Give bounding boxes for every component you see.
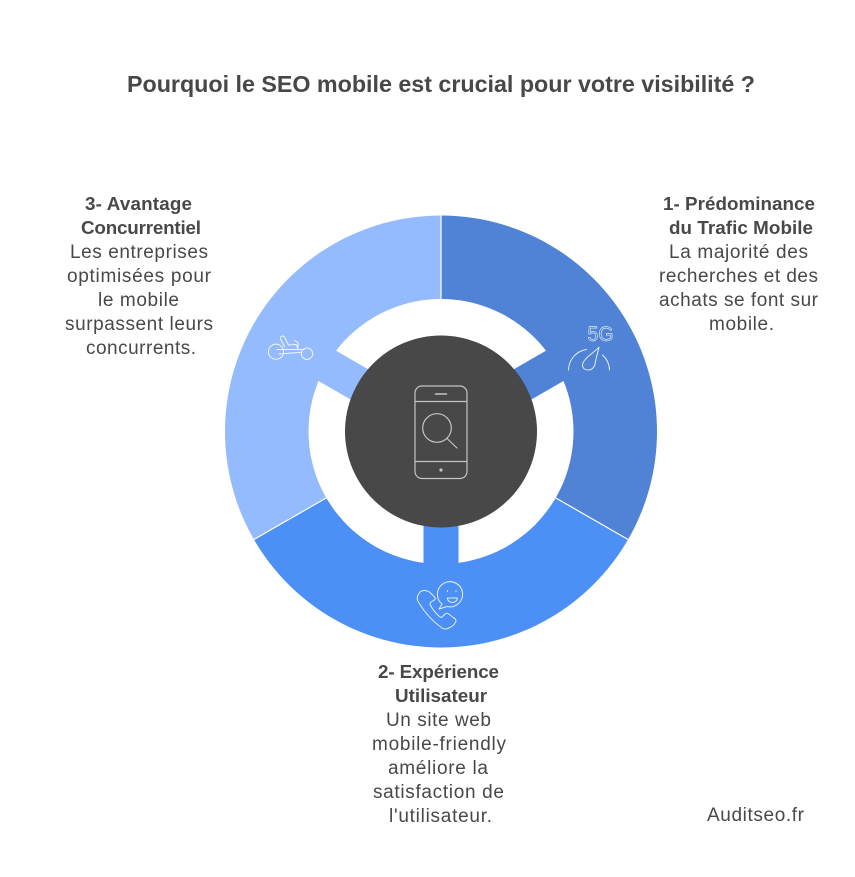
white inner ring [308, 299, 574, 564]
center circle [345, 336, 537, 528]
text block: 2 user experience: l'utilisateur. [389, 806, 492, 827]
text block: 1 mobile traffic [659, 193, 819, 335]
icon: 5G speedometer [568, 323, 614, 370]
text block: 3 competitive advantage: 3- Avantage [85, 193, 192, 214]
icon: smartphone with magnifier [415, 386, 467, 478]
source label: Auditseo.fr [707, 805, 805, 826]
text block: 2 user experience: satisfaction de [373, 782, 504, 803]
text block: 2 user experience: mobile-friendly [372, 734, 506, 755]
text block: 3 competitive advantage: Les entreprises [70, 242, 208, 263]
text block: 1 mobile traffic: mobile. [709, 314, 774, 335]
connector: segment 3 [310, 346, 414, 426]
text block: 1 mobile traffic: du Trafic Mobile [669, 217, 813, 238]
text block: 3 competitive advantage: le mobile [98, 290, 179, 311]
text block: 3 competitive advantage: optimisées pour [67, 266, 212, 287]
text block: 3 competitive advantage: surpassent leurs [65, 314, 213, 335]
icon: recumbent bike [268, 336, 313, 359]
text block: 1 mobile traffic: 1- Prédominance [663, 193, 815, 214]
text block: 1 mobile traffic: recherches et des [659, 266, 818, 287]
text block: 2 user experience: Utilisateur [395, 685, 488, 706]
text block: 2 user experience [372, 661, 506, 827]
icon: call with smiley [417, 582, 463, 629]
segment 1: mobile traffic [441, 216, 657, 540]
segment 3: competitive advantage [225, 216, 441, 540]
segment 2: user experience [254, 432, 628, 647]
text block: 1 mobile traffic: La majorité des [669, 242, 808, 263]
text block: 1 mobile traffic: achats se font sur [659, 290, 819, 311]
title: Pourquoi le SEO mobile est crucial pour votre visibilité ? [127, 71, 755, 97]
donut chart [225, 216, 657, 647]
connector: segment 1 [468, 346, 572, 426]
text block: 3 competitive advantage [65, 193, 213, 359]
text block: 2 user experience: 2- Expérience [378, 661, 499, 682]
segment separators [254, 216, 628, 540]
text block: 2 user experience: améliore la [388, 758, 488, 779]
text block: 3 competitive advantage: Concurrentiel [81, 217, 201, 238]
connector: segment 2 [424, 470, 458, 570]
text block: 2 user experience: Un site web [386, 710, 491, 731]
icon: 5G speedometer: 5G [588, 323, 614, 346]
text block: 3 competitive advantage: concurrents. [86, 338, 196, 359]
